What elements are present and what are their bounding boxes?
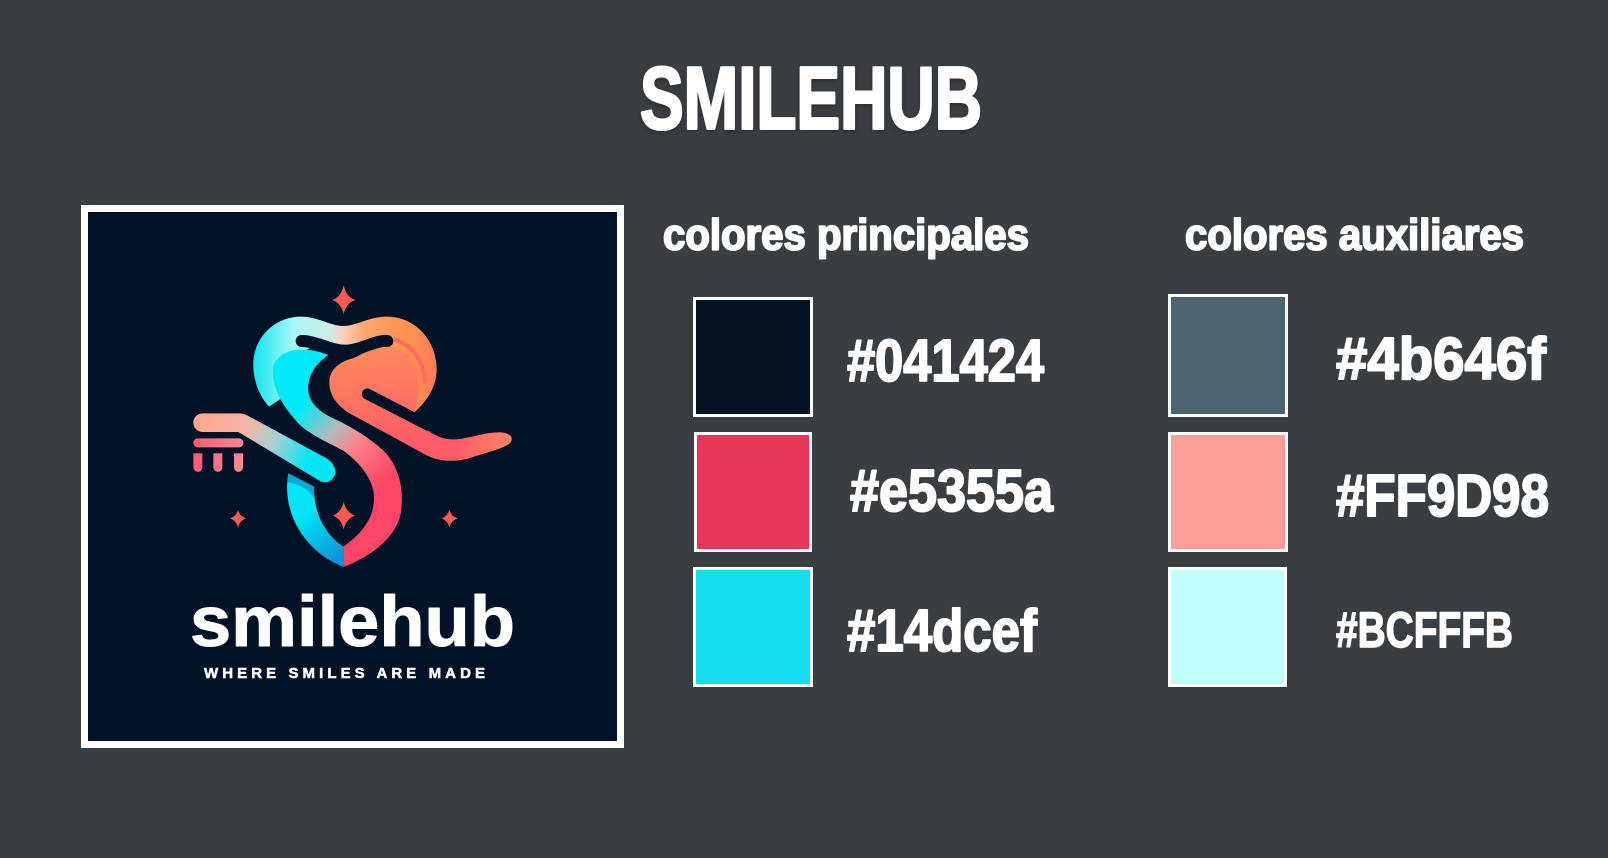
dark top line [302,341,387,351]
heart outline band [253,317,437,412]
lobe arc [394,339,425,383]
swatch: 041424: #041424 [847,328,1044,394]
logo frame [84,208,620,744]
swoosh tip [457,432,512,460]
icon: heart toothbrush mark [193,285,512,567]
coral lobe and swoosh [329,347,512,461]
logo tagline: WHERE SMILES ARE MADE [204,665,485,682]
swatch: BCFFFB: #BCFFFB [1336,602,1513,658]
heart tail [287,473,343,567]
panel: logo [84,208,620,744]
brush handle [193,413,335,482]
swatch: 4b646f [1170,296,1546,416]
swatch: 4b646f: #4b646f [1336,326,1546,392]
sparkles [230,285,458,529]
swatch: e5355a [696,434,1054,550]
swatch: BCFFFB [1170,568,1513,686]
swatch: 14dcef [694,568,1037,686]
title: SMILEHUB [640,48,982,148]
heading: colores principales: colores principales [663,210,1029,260]
swatch: FF9D98 [1170,434,1549,550]
heading: colores auxiliares: colores auxiliares [1185,210,1524,260]
bristle tufts [193,453,243,472]
dark swoosh line [367,394,428,425]
S body band [273,350,402,567]
bristle bar [193,438,243,447]
tail shade [287,473,314,497]
logo wordmark: smilehub [190,583,515,662]
swatch: 041424 [694,298,1044,416]
swatch: FF9D98: #FF9D98 [1336,463,1549,529]
swatch: 14dcef: #14dcef [847,598,1037,664]
swatch: e5355a: #e5355a [850,458,1054,524]
